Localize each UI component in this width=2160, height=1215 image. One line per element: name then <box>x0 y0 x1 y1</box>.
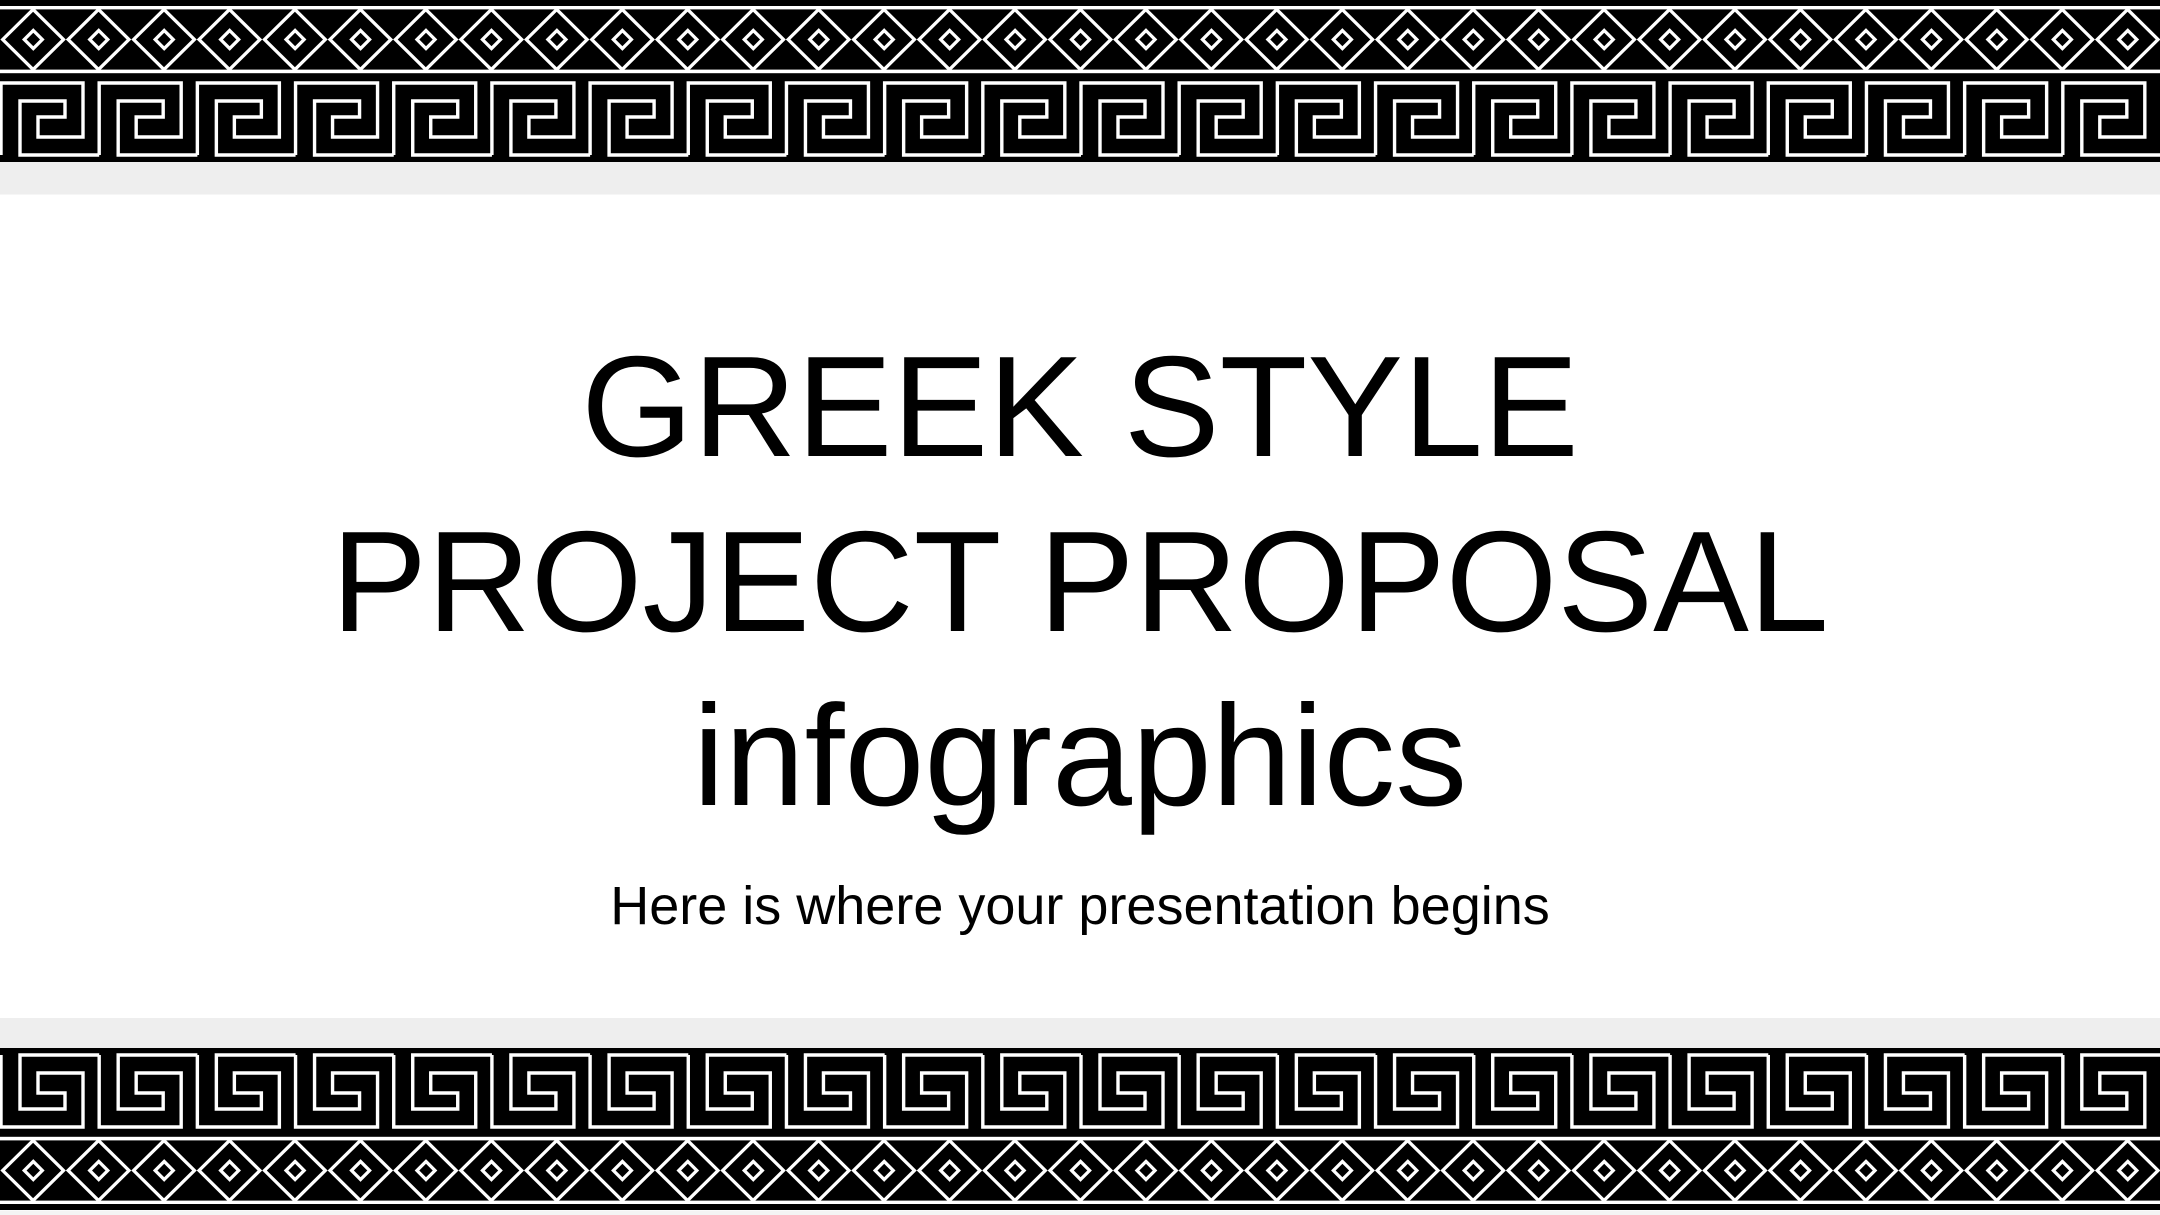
top border band <box>0 0 2160 162</box>
bottom edge strip <box>0 1210 2160 1215</box>
title line 1: GREEK STYLE <box>581 327 1579 487</box>
title line 2: PROJECT PROPOSAL <box>331 502 1829 662</box>
bottom grey strip <box>0 1018 2160 1048</box>
top grey strip <box>0 162 2160 194</box>
bottom border band <box>0 1048 2160 1210</box>
title line 3: infographics <box>693 676 1467 836</box>
subtitle: Here is where your presentation begins <box>610 876 1550 936</box>
